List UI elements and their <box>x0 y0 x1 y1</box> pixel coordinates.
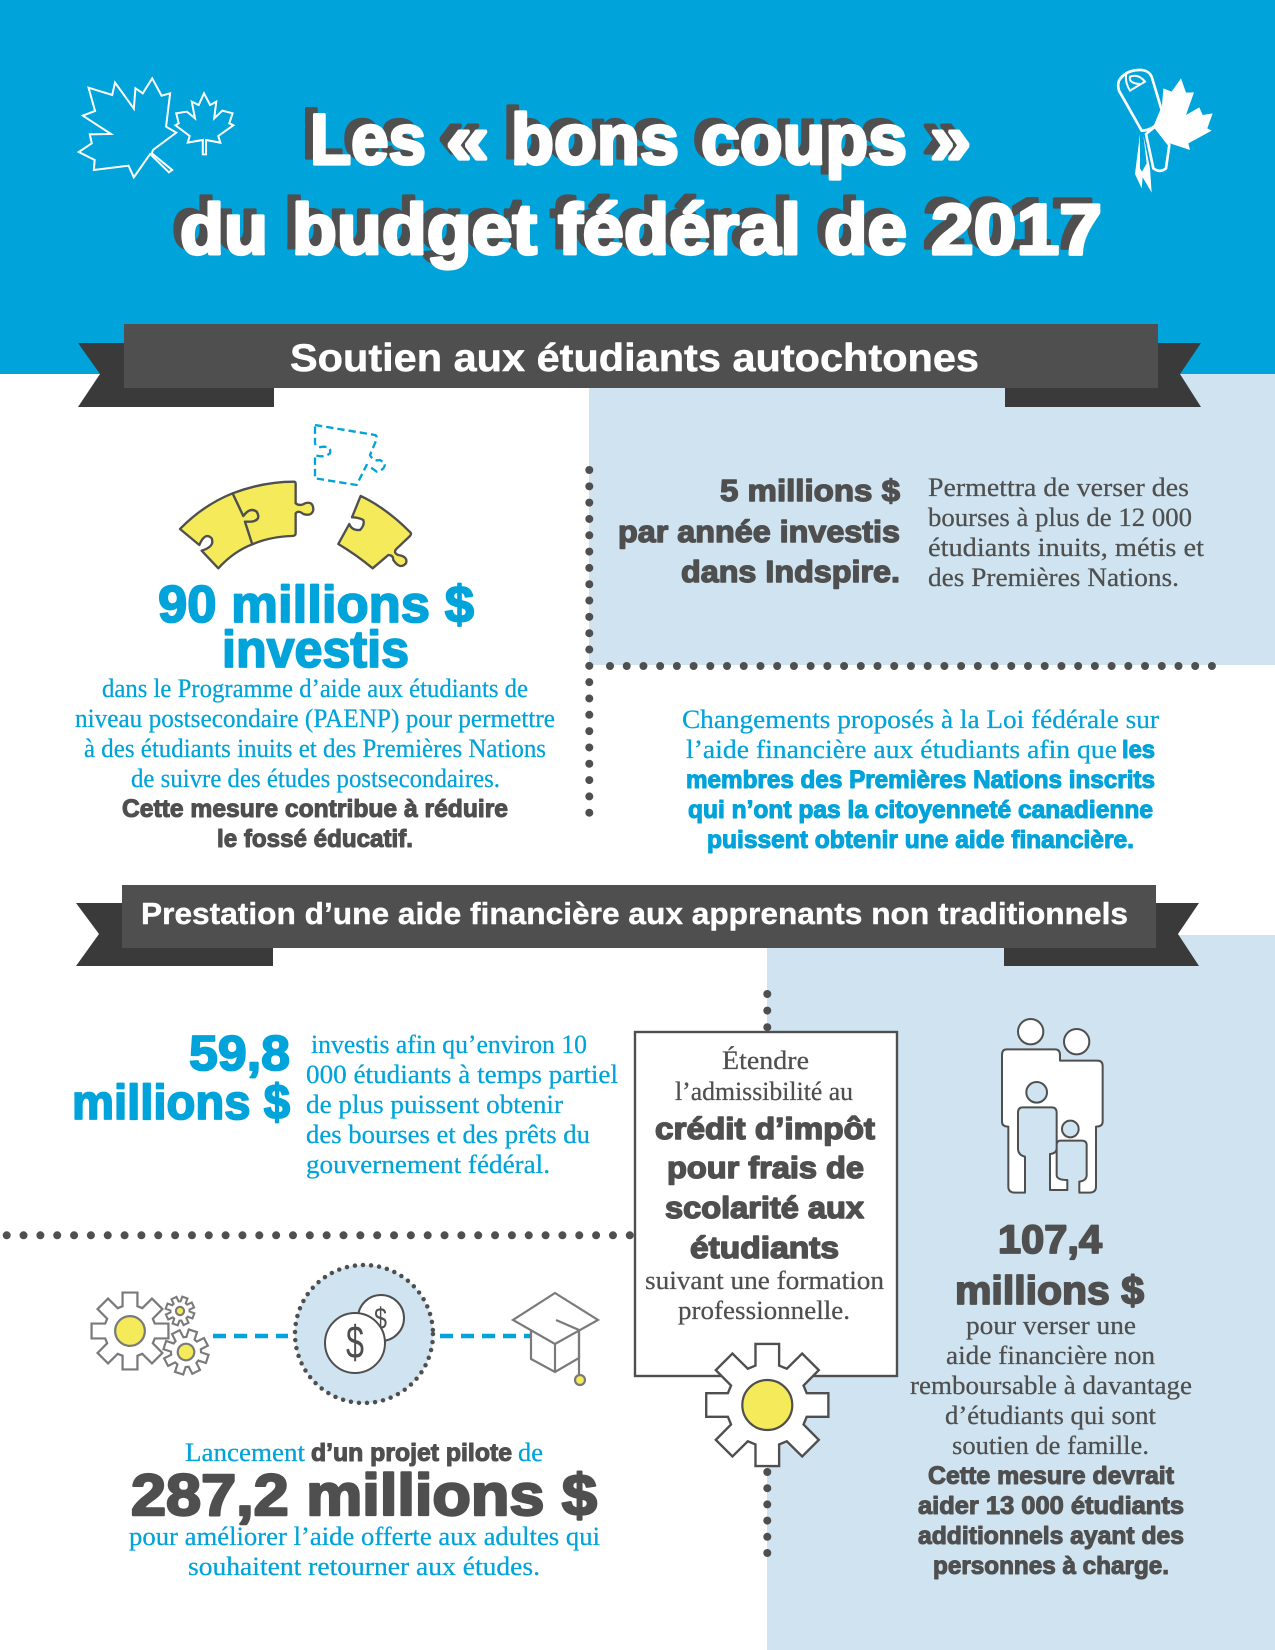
text block: Loi fédérale: l’aide financière aux étudiants afin que <box>686 734 1117 764</box>
text block: Indspire details: des Premières Nations. <box>928 562 1179 592</box>
arrow: dashes to graduation cap <box>440 1334 531 1338</box>
panel: crédit d'impôt box: scolarité aux <box>665 1190 865 1225</box>
title: » <box>930 101 971 180</box>
panel: crédit d'impôt box: crédit d’impôt <box>655 1111 875 1146</box>
text block: soutien de famille: Cette mesure devrait <box>928 1462 1175 1490</box>
icon: large gear <box>706 1344 828 1466</box>
ribbon: Prestation d'une aide financière <box>76 885 1199 966</box>
icon: diploma and maple leaf <box>1118 70 1213 193</box>
arrow: dashes to coins <box>213 1334 288 1338</box>
title: » <box>922 95 963 174</box>
text block: PAENP: dans le Programme d’aide aux étudiants de <box>102 673 528 703</box>
panel: crédit d'impôt box: étudiants <box>690 1230 839 1265</box>
stat: 59,8 millions: 59,8 <box>189 1027 290 1081</box>
title: du <box>180 191 268 270</box>
text block: soutien de famille: soutien de famille. <box>952 1430 1149 1460</box>
text block: Indspire details: étudiants inuits, métis et <box>928 532 1205 562</box>
icon: graduation cap <box>513 1293 598 1385</box>
title: bons <box>511 101 679 180</box>
stat: 5 millions Indspire: par année investis <box>618 514 900 549</box>
divider: vertical dots top <box>763 994 771 1032</box>
title: « <box>446 101 489 180</box>
text block: soutien de famille: pour verser une <box>966 1310 1136 1340</box>
title: 2017 <box>931 191 1102 270</box>
panel: crédit d'impôt box: l’admissibilité au <box>675 1076 853 1106</box>
text block: Loi fédérale: membres des Premières Nations inscrits <box>686 766 1155 794</box>
title: coups <box>693 95 899 174</box>
text block: Loi fédérale: qui n’ont pas la citoyenneté canadienne <box>688 796 1153 824</box>
icon: puzzle pieces <box>180 425 411 568</box>
text block: soutien de famille: personnes à charge. <box>933 1552 1169 1580</box>
text block: projet pilote <box>129 1437 600 1581</box>
stat: 5 millions Indspire: 5 millions $ <box>720 473 900 508</box>
stat: 107,4 millions <box>955 1218 1144 1313</box>
icon: coins in dotted circle <box>295 1265 433 1403</box>
title: fédéral <box>550 185 793 264</box>
text block: temps partiel: gouvernement fédéral. <box>306 1149 550 1179</box>
icon: maple leaves outline <box>79 78 233 177</box>
divider: vertical dots section one <box>585 470 593 814</box>
ribbon: Prestation d'une aide financière: Prestation d’une aide financière aux apprenants non traditionnels <box>141 896 1128 931</box>
panel: crédit d'impôt box: Étendre <box>722 1045 809 1075</box>
text block: soutien de famille: d’étudiants qui sont <box>945 1400 1157 1430</box>
panel: crédit d'impôt box: professionnelle. <box>678 1295 850 1325</box>
title: bons <box>503 95 671 174</box>
divider: horizontal dots section one <box>610 662 1213 670</box>
title: coups <box>701 101 907 180</box>
text block: projet pilote: pour améliorer l’aide offerte aux adultes qui <box>129 1521 600 1551</box>
title: « <box>438 95 481 174</box>
title: Les <box>310 101 426 180</box>
stat: 90 millions investis: 90 millions $ <box>158 576 474 634</box>
divider: horizontal dots section two <box>7 1231 631 1239</box>
text block: temps partiel: des bourses et des prêts du <box>306 1119 590 1149</box>
text block: projet pilote: 287,2 millions $ <box>131 1463 597 1528</box>
title <box>172 95 1102 270</box>
text block: projet pilote: Lancement <box>185 1437 306 1467</box>
title: 2017 <box>923 185 1094 264</box>
text block: temps partiel: 000 étudiants à temps partiel <box>306 1059 618 1089</box>
text block: soutien de famille <box>910 1310 1192 1580</box>
stat: 59,8 millions: millions $ <box>72 1076 290 1130</box>
text block: Loi fédérale: les <box>1122 736 1155 764</box>
divider: vertical dots bottom <box>763 1472 771 1554</box>
text block: PAENP: à des étudiants inuits et des Premières Nations <box>84 733 546 763</box>
title: du <box>172 185 260 264</box>
title: Les <box>302 95 418 174</box>
text block: PAENP: niveau postsecondaire (PAENP) pour permettre <box>75 703 555 733</box>
text block: Indspire details: Permettra de verser des <box>928 472 1189 502</box>
icon: coins in dotted circle: $ <box>346 1316 364 1368</box>
text block: soutien de famille: aider 13 000 étudiants <box>918 1492 1184 1520</box>
stat: 90 millions investis <box>158 576 474 679</box>
text block: soutien de famille: remboursable à davantage <box>910 1370 1192 1400</box>
title: budget <box>284 185 529 264</box>
stat: 5 millions Indspire <box>618 473 900 589</box>
title: fédéral <box>558 191 801 270</box>
title: budget <box>292 191 537 270</box>
text block: projet pilote: souhaitent retourner aux études. <box>188 1551 540 1581</box>
stat: 5 millions Indspire: dans Indspire. <box>681 554 900 589</box>
icon: family <box>1002 1019 1103 1193</box>
panel: Indspire background <box>589 374 1275 665</box>
icon: coins in dotted circle: $ <box>374 1301 387 1336</box>
text block: temps partiel <box>306 1029 618 1179</box>
text block: soutien de famille: additionnels ayant des <box>918 1522 1184 1550</box>
panel: crédit d'impôt box: pour frais de <box>667 1150 864 1185</box>
text block: Loi fédérale <box>682 704 1159 854</box>
text block: Indspire details <box>928 472 1205 592</box>
text block: temps partiel: investis afin qu’environ 10 <box>311 1029 587 1059</box>
stat: 90 millions investis: investis <box>222 621 409 679</box>
stat: 59,8 millions <box>72 1027 290 1130</box>
text block: Loi fédérale: puissent obtenir une aide financière. <box>707 826 1134 854</box>
title: de <box>816 185 899 264</box>
text block: Loi fédérale: Changements proposés à la Loi fédérale sur <box>682 704 1159 734</box>
panel: crédit d'impôt box: suivant une formation <box>645 1265 884 1295</box>
header background <box>0 0 1275 374</box>
text block: PAENP: Cette mesure contribue à réduire <box>122 795 508 823</box>
panel: family support background <box>767 935 1275 1650</box>
panel: crédit d'impôt box <box>635 1032 897 1376</box>
stat: 107,4 millions: millions $ <box>955 1269 1144 1313</box>
text block: PAENP <box>75 673 555 853</box>
text block: soutien de famille: aide financière non <box>946 1340 1155 1370</box>
ribbon: Soutien aux étudiants autochtones: Soutien aux étudiants autochtones <box>290 337 979 380</box>
icon: gears left <box>92 1293 214 1380</box>
text block: projet pilote: de <box>518 1437 543 1467</box>
title: de <box>824 191 907 270</box>
text block: PAENP: de suivre des études postsecondaires. <box>131 763 500 793</box>
ribbon: Soutien aux étudiants autochtones <box>78 324 1201 407</box>
text block: PAENP: le fossé éducatif. <box>217 825 413 853</box>
text block: temps partiel: de plus puissent obtenir <box>306 1089 563 1119</box>
text block: projet pilote: d’un projet pilote <box>311 1439 512 1467</box>
text block: Indspire details: bourses à plus de 12 000 <box>928 502 1192 532</box>
stat: 107,4 millions: 107,4 <box>998 1218 1103 1262</box>
